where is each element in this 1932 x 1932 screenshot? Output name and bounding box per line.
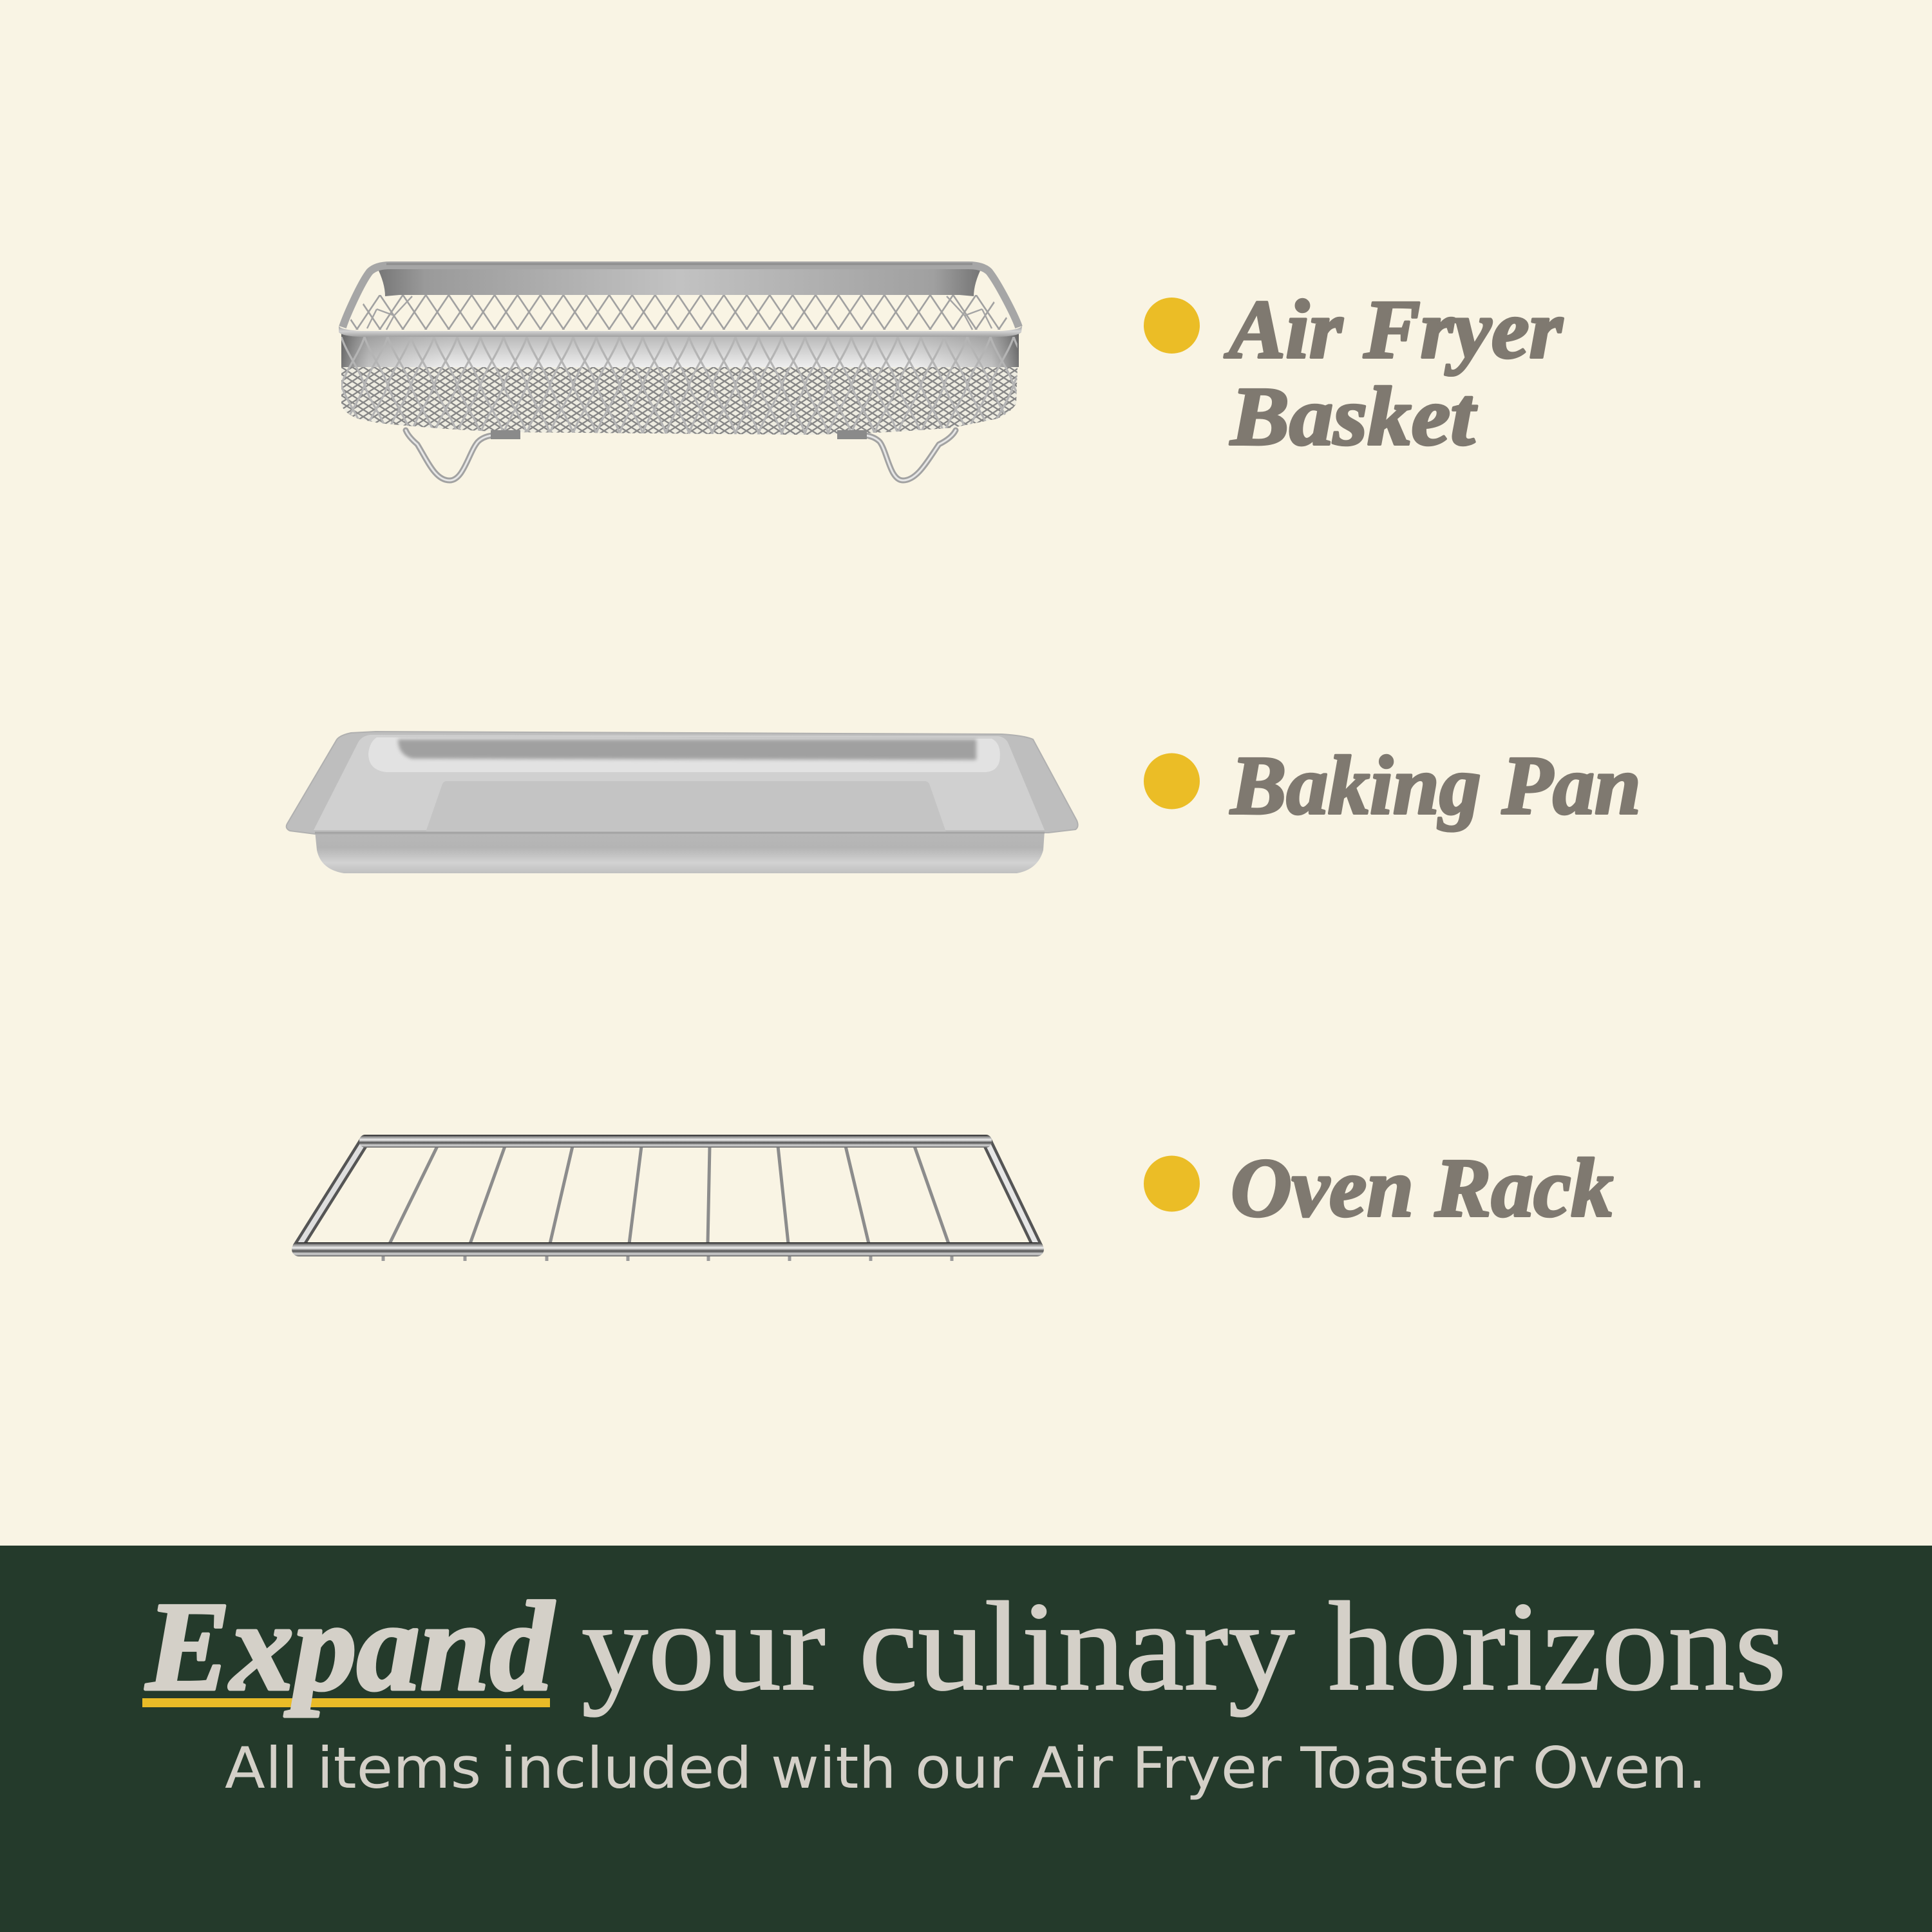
icon: air fryer basket [339,264,1022,480]
label: air fryer basket: Air Fryer [1224,283,1563,376]
basket left foot [406,430,520,480]
rack right side [987,1141,1037,1247]
rack wires [390,1146,949,1244]
basket right foot [837,430,956,480]
icon: baking pan [287,732,1078,873]
bullet: oven rack [1144,1155,1200,1212]
pan back wall [398,739,976,760]
heading: Expand [145,1576,555,1717]
page background [0,0,1932,1546]
bullet: air fryer basket [1144,298,1200,354]
bullet: baking pan [1144,753,1200,809]
label: air fryer basket: Basket [1229,370,1477,463]
label: oven rack: Oven Rack [1231,1142,1613,1235]
heading underline [142,1698,550,1707]
label: air fryer basket [1224,283,1563,463]
basket floor mesh [341,367,1018,435]
pan rim and flange [287,732,1078,834]
basket front wall [341,331,1019,367]
rack front bar [292,1242,1044,1256]
basket front wires [341,337,1018,435]
rack back bar [359,1135,992,1148]
pan floor [426,781,946,832]
basket side webs [367,296,992,330]
rack left side [298,1141,365,1247]
basket front rim [339,326,1022,337]
label: baking pan: Baking Pan [1229,739,1641,832]
pan inner sides [314,735,1045,830]
heading: your culinary horizons [582,1576,1786,1717]
subheading: All items included with our Air Fryer Toaster Oven. [225,1735,1707,1801]
basket back rim [343,265,1019,327]
basket back rim highlight [386,263,972,265]
pan front lip [315,832,1045,833]
pan back wall highlight [368,737,1000,772]
pan front wall [315,831,1045,873]
basket back wall [377,267,982,296]
icon: oven rack [292,1135,1044,1261]
rack stubs [383,1256,952,1261]
footer band [0,1546,1932,1932]
basket upper mesh [343,295,1016,330]
